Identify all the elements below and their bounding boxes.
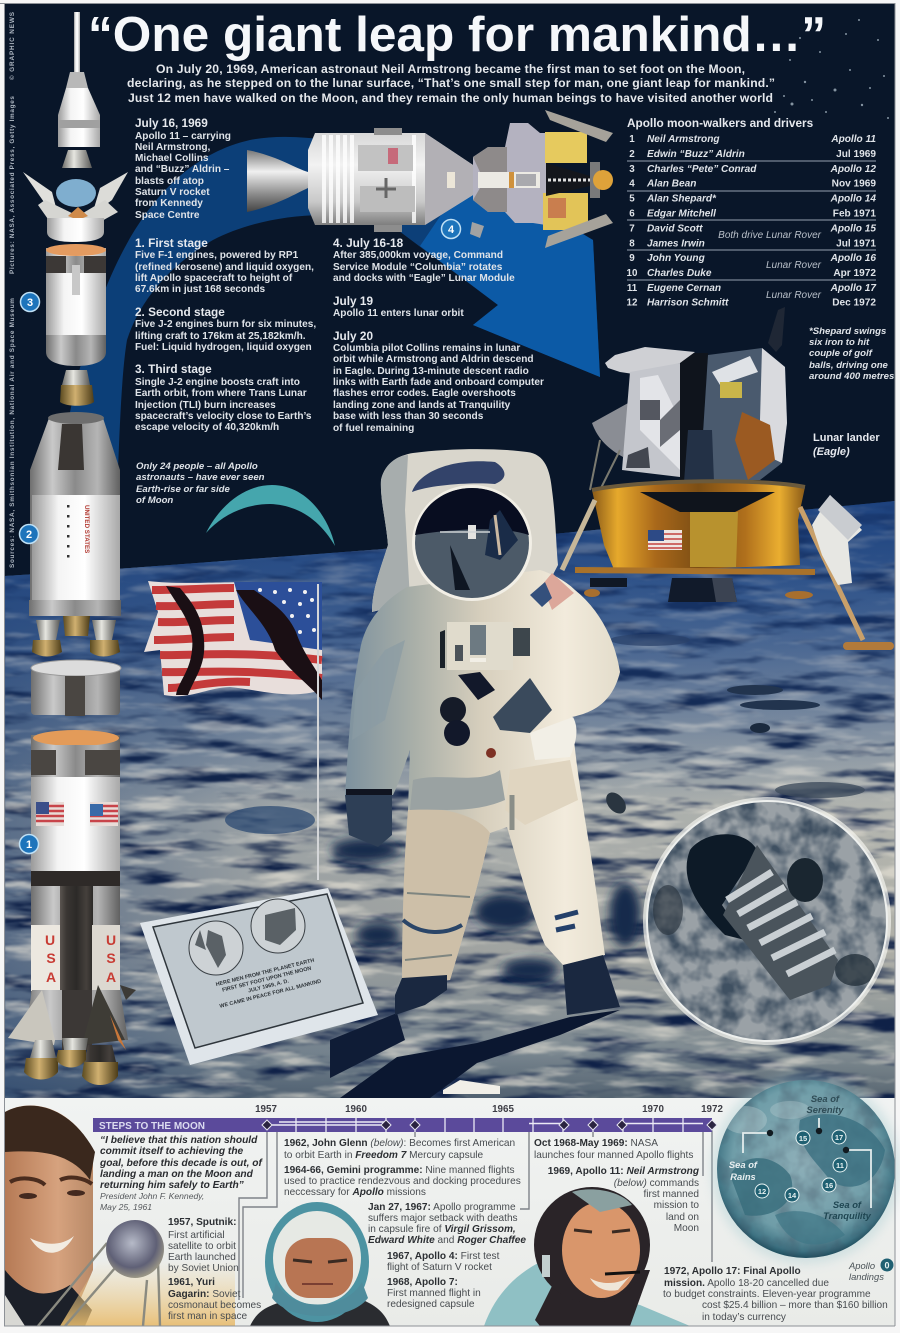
year labels: 1960 xyxy=(345,1104,367,1115)
landing legs xyxy=(562,500,890,646)
footnote: Shepard golf: *Shepard swings xyxy=(809,326,886,337)
1962 and 1964-66 text: 1964-66, Gemini programme: Nine manned flights xyxy=(284,1165,515,1176)
astronaut on ladder xyxy=(812,495,862,585)
1967-68 text: in capsule fire of Virgil Grissom, xyxy=(368,1224,516,1235)
first stage: U xyxy=(106,932,116,948)
blue trajectory arrow xyxy=(60,137,600,470)
Apollo 11 plaque: FIRST SET FOOT UPON THE MOON xyxy=(222,966,312,994)
stars xyxy=(774,19,889,119)
moon map of landing sites: 11 xyxy=(836,1161,844,1170)
credits, vertical text xyxy=(8,11,16,568)
footnote: Shepard golf: balls, driving one xyxy=(809,360,889,371)
1962 and 1964-66 text: neccessary for Apollo missions xyxy=(284,1187,426,1198)
first stage text: 67.6km in just 168 seconds xyxy=(135,284,266,295)
moon-walkers table xyxy=(627,116,877,308)
stage number markers: 1 xyxy=(26,839,32,851)
moon map of landing sites: 16 xyxy=(825,1181,833,1190)
third stage xyxy=(46,244,106,406)
sea labels: Sea of xyxy=(833,1199,862,1210)
1969 Apollo 11 text: mission to xyxy=(654,1200,699,1211)
moon map of landing sites: 12 xyxy=(758,1187,766,1196)
July 16 launch: July 16, 1969 xyxy=(135,116,208,130)
astronaut names: Neil Armstrong xyxy=(647,134,720,145)
Apollo landings key xyxy=(848,1258,894,1282)
Kennedy quote: returning him safely to Earth” xyxy=(100,1180,245,1191)
1957 Sputnik and 1961 Gagarin text: cosmonaut becomes xyxy=(168,1300,261,1311)
astronaut names: Charles Duke xyxy=(647,268,712,279)
1957 Sputnik and 1961 Gagarin text: Gagarin: Soviet xyxy=(168,1289,241,1300)
lunar lander label: (Eagle) xyxy=(813,446,850,458)
row numbers: 1 xyxy=(629,134,635,145)
missions and dates: Apr 1972 xyxy=(833,268,876,279)
first stage text: 1. First stage xyxy=(135,236,208,250)
moon map of landing sites: 14 xyxy=(788,1191,797,1200)
flag pole xyxy=(317,584,319,880)
timeline text: launch and stages xyxy=(135,116,544,434)
July 16 launch xyxy=(135,116,231,221)
third stage text: 3. Third stage xyxy=(135,362,212,376)
ascent stage xyxy=(590,307,787,490)
stage number markers xyxy=(20,292,40,854)
bottom panel: steps to the moon xyxy=(5,1074,900,1326)
second stage: UNITED STATES xyxy=(83,505,90,553)
Oct 1968 text: Oct 1968-May 1969: NASA xyxy=(534,1138,658,1149)
lunar lander label: Lunar lander xyxy=(813,432,880,444)
descent stage gold foil xyxy=(575,481,815,602)
year labels xyxy=(255,1104,723,1115)
connector lines xyxy=(239,1130,712,1300)
fins and engines xyxy=(8,990,55,1045)
1962 and 1964-66 text xyxy=(284,1138,521,1198)
credits, vertical text: © GRAPHIC NEWS xyxy=(8,11,16,80)
1967-68 text: redesigned capsule xyxy=(387,1299,475,1310)
astronaut names: David Scott xyxy=(647,224,703,234)
July 20 text: orbit while Armstrong and Aldrin descend xyxy=(333,354,534,365)
stage number markers: 3 xyxy=(27,297,33,309)
Kennedy quote xyxy=(99,1135,263,1212)
lander flag xyxy=(648,530,682,550)
1957 Sputnik and 1961 Gagarin text xyxy=(168,1217,261,1322)
rover notes xyxy=(718,230,822,301)
sea labels: Sea of xyxy=(729,1159,758,1170)
1962 and 1964-66 text: used to practice rendezvous and docking procedures xyxy=(284,1176,521,1187)
rover notes: Both drive Lunar Rover xyxy=(718,230,822,241)
row numbers: 10 xyxy=(627,268,638,279)
July 16 launch: from Kennedy xyxy=(135,198,203,209)
row numbers: 7 xyxy=(629,224,635,234)
docked lunar module xyxy=(473,110,613,248)
blurred ground shadows by the legs xyxy=(331,838,641,982)
marker 4: 4 xyxy=(448,224,455,236)
Apollo 11 plaque xyxy=(140,888,378,1065)
July 16-18 text xyxy=(333,236,515,284)
July 20 text: July 20 xyxy=(333,329,373,343)
row numbers: 11 xyxy=(627,283,638,294)
command and service module xyxy=(247,128,473,232)
first stage: A xyxy=(46,969,56,985)
first stage: S xyxy=(46,950,56,966)
July 16 launch: and “Buzz” Aldrin – xyxy=(135,164,230,175)
1972 Apollo 17 text: in today’s currency xyxy=(702,1312,787,1323)
footnote: Shepard golf xyxy=(809,326,894,382)
July 16 launch: Neil Armstrong, xyxy=(135,142,211,153)
July 20 text: Columbia pilot Collins remains in lunar xyxy=(333,343,520,354)
stage number markers: 2 xyxy=(26,529,32,541)
timeline bar xyxy=(93,1104,723,1132)
July 20 text: landing zone and lands at Tranquility xyxy=(333,400,511,411)
missions and dates xyxy=(830,134,877,308)
moon-walkers table: Apollo moon-walkers and drivers xyxy=(627,116,814,130)
landing site markers xyxy=(755,1130,847,1202)
Kennedy quote: commit itself to achieving the xyxy=(100,1146,244,1157)
second stage text: Fuel: Liquid hydrogen, liquid oxygen xyxy=(135,342,312,353)
first stage xyxy=(8,730,136,1085)
year labels: 1965 xyxy=(492,1104,514,1115)
boots xyxy=(395,975,447,1015)
descent engine xyxy=(668,578,737,602)
gloves xyxy=(493,678,552,733)
1972 Apollo 17 text: to budget constraints. Eleven-year programme xyxy=(663,1289,871,1300)
second stage text xyxy=(135,305,316,353)
third stage text: escape velocity of 40,320km/h xyxy=(135,422,279,433)
intro paragraph: Just 12 men have walked on the Moon, and they remain the only human beings to have visited another world xyxy=(128,91,773,105)
July 16 launch: Saturn V rocket xyxy=(135,187,210,198)
intro paragraph xyxy=(127,62,775,105)
astronaut names: Harrison Schmitt xyxy=(647,298,729,308)
astronaut long shadow xyxy=(340,1010,620,1098)
Earth-rise note: astronauts – have ever seen xyxy=(136,472,265,483)
missions and dates: Jul 1969 xyxy=(836,149,876,160)
Sputnik satellite illustration xyxy=(38,1220,235,1326)
astronaut names: Charles “Pete” Conrad xyxy=(647,164,757,175)
escape tower and command module xyxy=(58,12,100,168)
astronaut names xyxy=(646,134,757,308)
July 16-18 text: 4. July 16-18 xyxy=(333,236,404,250)
first stage: S xyxy=(106,950,116,966)
missions and dates: Nov 1969 xyxy=(832,178,876,190)
July 16 launch: Apollo 11 – carrying xyxy=(135,131,231,142)
second stage text: 2. Second stage xyxy=(135,305,225,319)
1969 Apollo 11 text: Moon xyxy=(674,1223,699,1234)
1972 Apollo 17 text: mission. Apollo 18-20 cancelled due xyxy=(664,1278,829,1289)
astronaut names: Eugene Cernan xyxy=(647,283,721,294)
missions and dates: Dec 1972 xyxy=(832,298,876,308)
moon map of landing sites: 15 xyxy=(799,1134,807,1143)
Oct 1968 text: launches four manned Apollo flights xyxy=(534,1150,693,1161)
third stage text xyxy=(135,362,312,433)
1957 Sputnik and 1961 Gagarin text: satellite to orbit xyxy=(168,1241,236,1252)
1957 Sputnik and 1961 Gagarin text: by Soviet Union xyxy=(168,1263,239,1274)
diamonds xyxy=(262,1120,717,1130)
first stage text xyxy=(135,236,314,295)
July 20 text: in Eagle. During 13-minute descent radio xyxy=(333,366,529,377)
1967-68 text xyxy=(368,1202,526,1310)
Saturn V exploded rocket xyxy=(8,12,136,1085)
1967-68 text: flight of Saturn V rocket xyxy=(387,1262,492,1273)
lunar lander label xyxy=(813,432,880,458)
July 20 text: of fuel remaining xyxy=(333,423,414,434)
footnote: Shepard golf: around 400 metres xyxy=(809,371,894,382)
1967-68 text: 1967, Apollo 4: First test xyxy=(387,1251,500,1262)
1957 Sputnik and 1961 Gagarin text: Earth launched xyxy=(168,1252,236,1263)
1957 Sputnik and 1961 Gagarin text: First artificial xyxy=(168,1230,225,1241)
lunar module adapter petals xyxy=(23,172,128,242)
marker 4 xyxy=(442,220,484,238)
Apollo 11 plaque: WE CAME IN PEACE FOR ALL MANKIND xyxy=(219,979,322,1010)
lunar lander Eagle xyxy=(562,307,890,646)
title: “One giant leap for mankind…” xyxy=(88,8,826,62)
1967-68 text: suffers major setback with deaths xyxy=(368,1213,518,1224)
photo: John F Kennedy xyxy=(5,1106,95,1326)
1967-68 text: First manned flight in xyxy=(387,1288,481,1299)
1957 Sputnik and 1961 Gagarin text: first man in space xyxy=(168,1311,247,1322)
moon surface xyxy=(5,500,895,1100)
Earth-rise note: of Moon xyxy=(136,495,173,506)
second stage text: lifting craft to 176km at 25,182km/h. xyxy=(135,331,306,342)
July 20 text: base with less than 30 seconds xyxy=(333,411,484,422)
1967-68 text: Jan 27, 1967: Apollo programme xyxy=(368,1202,516,1213)
moon map of landing sites xyxy=(711,1074,900,1264)
first stage: U xyxy=(45,932,55,948)
July 20 text: flashes error codes. Eagle overshoots xyxy=(333,388,516,399)
Kennedy quote: goal, before this decade is out, of xyxy=(99,1158,263,1169)
year labels: 1970 xyxy=(642,1104,664,1115)
row numbers xyxy=(627,134,638,308)
row numbers: 3 xyxy=(629,164,635,175)
sea labels: Serenity xyxy=(806,1104,844,1115)
July 19 text: July 19 xyxy=(333,294,373,308)
Earth-rise note xyxy=(136,461,265,506)
1969 Apollo 11 text: first manned xyxy=(643,1189,699,1200)
first stage text: lift Apollo spacecraft to height of xyxy=(135,273,293,284)
visor with reflection xyxy=(412,485,532,601)
July 16-18 text: and docks with “Eagle” Lunar Module xyxy=(333,273,515,284)
1967-68 text: 1968, Apollo 7: xyxy=(387,1277,458,1288)
third stage text: spacecraft’s velocity close to Earth’s xyxy=(135,411,312,422)
second stage xyxy=(29,412,121,656)
astronaut names: James Irwin xyxy=(647,238,705,250)
July 16-18 text: Service Module “Columbia” rotates xyxy=(333,262,503,273)
1972 Apollo 17 text xyxy=(663,1266,888,1323)
photo: John Glenn xyxy=(250,1202,390,1326)
Kennedy quote: landing a man on the Moon and xyxy=(100,1169,254,1180)
helmet and backpack xyxy=(372,449,558,612)
astronaut names: Alan Bean xyxy=(646,178,696,190)
sea labels: Tranquility xyxy=(823,1210,872,1221)
July 19 text: Apollo 11 enters lunar orbit xyxy=(333,308,464,319)
intro paragraph: declaring, as he stepped on to the lunar surface, “That’s one small step for man, one giant leap for mankind.” xyxy=(127,76,775,90)
second stage text: Five J-2 engines burn for six minutes, xyxy=(135,319,316,330)
July 20 text: links with Earth fade and onboard computer xyxy=(333,377,544,388)
1969 Apollo 11 text xyxy=(548,1166,699,1234)
footprint photo xyxy=(643,797,891,1045)
1962 and 1964-66 text: 1962, John Glenn (below): Becomes first American xyxy=(284,1138,515,1149)
Kennedy quote: May 25, 1961 xyxy=(100,1202,152,1212)
missions and dates: Apollo 14 xyxy=(830,194,876,204)
missions and dates: Apollo 15 xyxy=(830,224,876,234)
1967-68 text: Edward White and Roger Chaffee xyxy=(368,1235,526,1246)
Apollo landings key: Apollo xyxy=(848,1260,875,1271)
Kennedy quote: President John F. Kennedy, xyxy=(100,1191,204,1201)
missions and dates: Jul 1971 xyxy=(836,238,876,250)
row numbers: 2 xyxy=(629,149,635,160)
year labels: 1957 xyxy=(255,1104,277,1115)
1957 Sputnik and 1961 Gagarin text: 1957, Sputnik: xyxy=(168,1217,236,1228)
icon: crescent Earth xyxy=(206,485,335,546)
astronaut names: John Young xyxy=(647,253,705,264)
July 16 launch: Michael Collins xyxy=(135,153,209,164)
missions and dates: Apollo 11 xyxy=(830,134,876,145)
shoulder flag xyxy=(530,573,574,610)
astronaut Buzz Aldrin xyxy=(345,449,620,1015)
sea labels: Rains xyxy=(730,1171,756,1182)
third stage text: Injection (TLI) burn increases xyxy=(135,400,276,411)
rocket flags xyxy=(36,802,118,826)
astronaut names: Edgar Mitchell xyxy=(647,208,716,220)
missions and dates: Apollo 12 xyxy=(830,164,876,175)
photo: Neil Armstrong xyxy=(484,1187,690,1326)
missions and dates: Apollo 16 xyxy=(830,253,876,264)
footnote: Shepard golf: couple of golf xyxy=(809,348,873,359)
timeline bar: STEPS TO THE MOON xyxy=(99,1121,205,1132)
year labels: 1972 xyxy=(701,1104,723,1115)
row numbers: 4 xyxy=(629,178,635,190)
rover notes: Lunar Rover xyxy=(766,260,822,271)
first stage text: Five F-1 engines, powered by RP1 xyxy=(135,250,299,261)
moon pointers xyxy=(743,1118,871,1208)
Apollo 11 plaque: JULY 1969, A. D. xyxy=(248,978,290,994)
Apollo landings key: 0 xyxy=(884,1260,890,1270)
1972 Apollo 17 text: 1972, Apollo 17: Final Apollo xyxy=(664,1266,801,1277)
Earth-rise note: Earth-rise or far side xyxy=(136,484,231,495)
Earth-rise note: Only 24 people – all Apollo xyxy=(136,461,258,472)
missions and dates: Apollo 17 xyxy=(830,283,877,294)
first stage text: (refined kerosene) and liquid oxygen, xyxy=(135,262,314,273)
intro paragraph: On July 20, 1969, American astronaut Neil Armstrong became the first man to set foot on the Moon, xyxy=(156,62,745,76)
1969 Apollo 11 text: land on xyxy=(666,1212,699,1223)
row numbers: 9 xyxy=(629,253,635,264)
July 16 launch: Space Centre xyxy=(135,210,200,221)
Oct 1968 text xyxy=(534,1138,693,1161)
row numbers: 8 xyxy=(629,238,635,250)
astronaut names: Edwin “Buzz” Aldrin xyxy=(647,149,745,160)
1969 Apollo 11 text: (below) commands xyxy=(614,1178,699,1189)
1957 Sputnik and 1961 Gagarin text: 1961, Yuri xyxy=(168,1277,215,1288)
astronaut names: Alan Shepard* xyxy=(646,194,717,204)
American flag xyxy=(144,581,322,880)
credits, vertical text: Sources: NASA, Smithsonian Institution, National Air and Space Museum xyxy=(9,298,16,568)
moon map of landing sites: 17 xyxy=(835,1133,843,1142)
third stage text: Earth orbit, from where Trans Lunar xyxy=(135,388,307,399)
rover notes: Lunar Rover xyxy=(766,290,822,301)
row numbers: 6 xyxy=(629,208,635,220)
first stage: A xyxy=(106,969,116,985)
July 19 text xyxy=(333,294,464,319)
credits, vertical text: Pictures: NASA, Associated Press, Getty Images xyxy=(9,96,16,274)
interstage ring xyxy=(31,660,121,716)
third stage text: Single J-2 engine boosts craft into xyxy=(135,377,300,388)
1972 Apollo 17 text: cost $25.4 billion – more than $160 billion xyxy=(702,1300,888,1311)
July 20 text xyxy=(333,329,544,434)
1962 and 1964-66 text: to orbit Earth in Freedom 7 Mercury capsule xyxy=(284,1150,484,1161)
sea labels xyxy=(729,1093,872,1221)
missions and dates: Feb 1971 xyxy=(833,208,876,220)
July 16-18 text: After 385,000km voyage, Command xyxy=(333,250,503,261)
suit body and arms xyxy=(345,570,620,985)
chest control unit xyxy=(440,622,530,758)
sea labels: Sea of xyxy=(811,1093,840,1104)
Kennedy quote: “I believe that this nation should xyxy=(100,1135,258,1146)
row numbers: 12 xyxy=(627,298,638,308)
Apollo landings key: landings xyxy=(849,1271,884,1282)
1969 Apollo 11 text: 1969, Apollo 11: Neil Armstrong xyxy=(548,1166,699,1177)
Apollo 11 plaque: HERE MEN FROM THE PLANET EARTH xyxy=(215,958,315,988)
July 16 launch: blasts off atop xyxy=(135,176,204,187)
row numbers: 5 xyxy=(629,194,635,204)
footnote: Shepard golf: six iron to hit xyxy=(809,337,870,348)
